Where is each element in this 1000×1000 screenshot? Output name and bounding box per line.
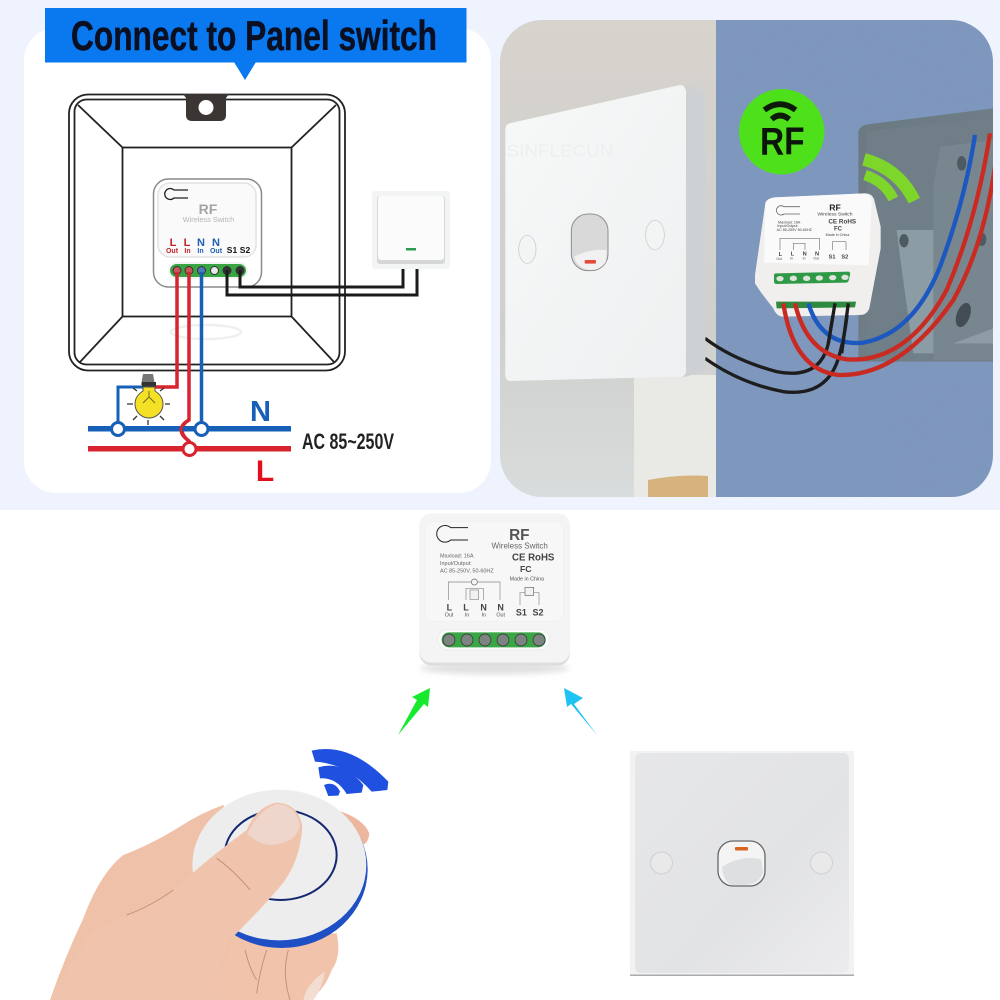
junction box (858, 108, 993, 362)
RF module photo (755, 193, 881, 317)
black wires (705, 315, 849, 394)
arrow: blue (564, 688, 597, 735)
module diagram (154, 179, 262, 287)
terminal labels: S1 (227, 245, 237, 255)
colored wires (783, 133, 995, 375)
heading banner (45, 8, 466, 80)
RF text: RF (760, 120, 805, 164)
module small text: N (803, 252, 807, 258)
icon: wifi waves (764, 104, 796, 119)
fingernail (303, 972, 325, 1000)
terminal labels: In (197, 248, 204, 255)
module small text (776, 211, 856, 261)
module small text: S2 (841, 254, 848, 260)
arrow: green (398, 688, 430, 735)
made in china: Made in China (510, 576, 544, 582)
thumb (50, 803, 302, 1000)
product: RF wireless switch module: In (465, 612, 469, 618)
terminal strip (168, 262, 248, 279)
module title: RF (829, 203, 841, 213)
certification marks: CE RoHS (512, 553, 555, 564)
mounting tab (183, 94, 229, 121)
product: RF wireless switch module: Out (496, 612, 505, 618)
module subtitle: Wireless Switch (183, 215, 234, 224)
FC mark: FC (520, 564, 532, 574)
module small text: AC 85-250V 50-60HZ (777, 228, 813, 232)
top background band (0, 0, 1000, 510)
wifi waves (312, 749, 388, 796)
module small text: Input/Output: (777, 224, 798, 228)
label: AC voltage: AC 85~250V (302, 429, 394, 454)
remote base (196, 791, 368, 948)
specs: AC 85-250V, 50-60HZ (440, 568, 494, 574)
module small text: Out (776, 257, 782, 261)
terminal labels: L (463, 603, 469, 613)
terminal labels: N (212, 237, 220, 249)
terminal labels: S1 (516, 608, 527, 618)
module small text: N (815, 252, 819, 258)
terminal labels: Out (166, 248, 179, 255)
remote top (192, 790, 366, 940)
wall switch (630, 751, 854, 976)
terminal labels: N (197, 237, 205, 249)
product: RF wireless switch module: Out (445, 612, 454, 618)
terminal labels: N (497, 603, 504, 613)
rocker button (718, 841, 765, 886)
terminal labels: L (170, 237, 177, 249)
icon: light bulb (127, 374, 170, 425)
specs: Maxload: 16A (440, 553, 474, 559)
fingers behind remote (337, 810, 369, 845)
icon: remote with hand (50, 749, 388, 1000)
label: L: L (256, 455, 274, 488)
module small text: In (803, 257, 806, 261)
watermark: SINFLECUN (507, 141, 613, 161)
terminal labels (447, 603, 543, 618)
terminal labels: S2 (240, 245, 250, 255)
panel: wiring diagram (24, 28, 491, 493)
screw cover right (810, 852, 832, 874)
module small text: In (790, 257, 793, 261)
product: RF wireless switch module (419, 513, 570, 674)
specs (440, 553, 494, 574)
wall plate outline (69, 94, 345, 370)
antenna icon (165, 189, 188, 200)
mains lines (88, 420, 291, 456)
module small text: FC (834, 227, 843, 233)
module small text: Made in China (826, 233, 850, 237)
subtitle: Wireless Switch (491, 541, 548, 550)
circuit lines (448, 582, 539, 605)
label: N: N (250, 396, 271, 428)
RF badge (739, 89, 824, 174)
module title: RF (199, 201, 218, 217)
remote button ring (225, 810, 337, 900)
terminal labels: Out (210, 248, 223, 255)
screw cover left (650, 852, 672, 874)
terminal labels: S2 (532, 608, 543, 618)
module small text: L (779, 252, 783, 258)
product: RF wireless switch module: In (481, 612, 486, 618)
module small text: CE RoHS (828, 218, 856, 225)
panel: installation photo (500, 20, 995, 497)
live and neutral wires (118, 272, 202, 449)
green wave icon (864, 159, 914, 201)
antenna icon (437, 525, 468, 542)
black switch wires (227, 268, 417, 295)
module small text: S1 (829, 254, 836, 260)
terminal labels (166, 237, 250, 255)
terminal labels: L (184, 237, 191, 249)
faint ring (171, 325, 241, 339)
title: RF (509, 527, 530, 544)
terminal labels: In (184, 248, 191, 255)
heading text: Connect to Panel switch (71, 12, 437, 59)
terminal strip (774, 272, 850, 284)
thumb nail (247, 804, 300, 845)
module small text: Maxload: 16A (778, 220, 801, 224)
finger creases (127, 858, 290, 1000)
specs: Input/Output: (440, 561, 472, 567)
terminal labels: L (447, 603, 453, 613)
module small text: Out (813, 257, 819, 261)
switch plate (505, 85, 705, 381)
panel switch icon (372, 191, 450, 269)
hand (50, 805, 257, 1000)
terminal labels: N (480, 603, 487, 613)
module small text: L (791, 252, 795, 258)
terminal strip (438, 629, 549, 650)
module small text: Wireless Switch (817, 211, 853, 217)
